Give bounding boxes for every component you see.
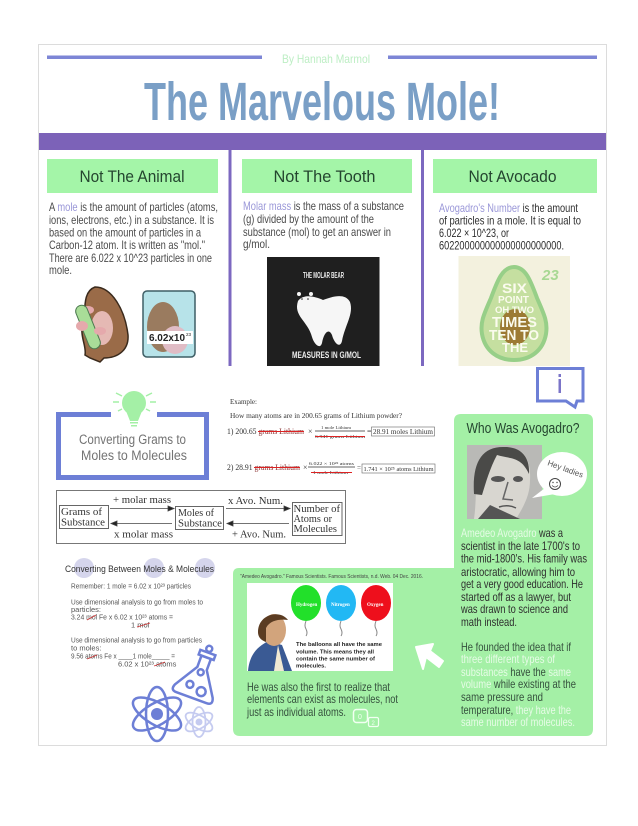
text block: Avogadro biography: scientist in the late 1700's to: [461, 539, 580, 553]
worked example: How many atoms are in 200.65 grams of Lithium powder?: [230, 412, 402, 420]
text block: dimensional analysis: to moles:: [71, 644, 101, 652]
heading: not the animal: [47, 159, 218, 193]
text block: dimensional analysis: Use dimensional analysis to go from particles: [71, 636, 202, 644]
text block: dimensional analysis: particles:: [71, 605, 101, 614]
balloon: hydrogen: [291, 585, 321, 636]
arrow labels: + molar mass: [113, 495, 171, 506]
image: avocado: THE: [502, 340, 528, 355]
byline: By Hannah Marmol: [282, 52, 370, 66]
image: avocado: OH TWO: [495, 305, 534, 316]
image: molar bear tooth: MEASURES IN G/MOL: [292, 350, 361, 361]
text block: Avogadro's law: same number of molecules.: [461, 715, 575, 729]
callout: hey ladies speech bubble: [532, 452, 587, 498]
image: molar bear tooth: THE MOLAR BEAR: [303, 271, 344, 280]
text block: mole definition: A mole is the amount of particles (atoms,: [49, 200, 218, 214]
step 1: 6.941 grams Lithium: [315, 434, 366, 439]
text block: Avogadro's number: [439, 201, 581, 252]
column divider 2: [421, 150, 424, 366]
text block: Avogadro's law: temperature, they have the: [461, 703, 571, 717]
box: number of atoms or molecules: Number of: [294, 504, 341, 515]
text block: mole definition: based on the amount of particles in a: [49, 226, 201, 240]
box: grams of substance: Grams of: [61, 507, 103, 518]
icon: O2 molecule: 0: [358, 714, 362, 721]
image: balloons with Avogadro: [247, 583, 393, 671]
step 2: [227, 461, 435, 475]
text block: Avogadro biography: was drawn to science and: [460, 602, 568, 616]
text block: dimensional analysis: 1 mol: [131, 620, 150, 630]
balloon caption: The balloons all have the same: [296, 642, 382, 648]
image: avocado: POINT: [498, 294, 530, 306]
step 2: =: [357, 464, 361, 472]
text block: Avogadro biography: math instead.: [461, 615, 517, 629]
icon: mole in beaker: 6.02x10: [149, 333, 185, 344]
arrow labels: + Avo. Num.: [232, 530, 286, 540]
balloon: oxygen: Oxygen: [367, 603, 384, 608]
text block: mole definition: [49, 200, 218, 277]
arrow labels: x molar mass: [114, 530, 173, 540]
step 1: ×: [308, 427, 313, 436]
text block: molar mass definition: g/mol.: [243, 237, 270, 251]
text block: Avogadro biography: aristocratic, allowing him to: [461, 565, 575, 579]
balloon caption: contain the same number of: [296, 656, 375, 662]
icon: small atom: [183, 707, 215, 737]
header rule: right: [388, 56, 597, 59]
text block: Avogadro's law: He founded the idea that if: [461, 640, 572, 654]
text block: mole definition: mole.: [49, 263, 72, 277]
image: avocado: TEN TO: [489, 328, 539, 344]
step 1: 28.91 moles Lithium: [373, 427, 433, 436]
worked example: [227, 398, 435, 475]
arrow labels: [113, 495, 286, 540]
red cancel marks: [87, 615, 165, 666]
box: moles of substance: Moles of: [178, 508, 214, 519]
worked example: Example:: [230, 398, 257, 406]
step 1: =: [367, 427, 372, 436]
text block: Avogadro's law: three different types of: [461, 652, 556, 666]
icon: light bulb: [113, 391, 156, 426]
text block: molecules note: [246, 680, 399, 719]
heading: not the tooth: Not The Tooth: [274, 167, 376, 186]
text block: mole definition: There are 6.022 x 10^23 particles in one: [49, 251, 212, 265]
icon: mole in beaker: [143, 291, 195, 357]
image: avocado: TIMES: [492, 314, 537, 331]
image: Avogadro portrait: [467, 445, 542, 519]
text block: molar mass definition: Molar mass is the mass of a substance: [243, 199, 404, 213]
icon: flask: [172, 639, 230, 705]
arrows: [110, 506, 290, 526]
panel: converting between moles and molecules: [65, 558, 230, 741]
step 2: 1 mole Lithium: [313, 470, 349, 475]
step 2: 2) 28.91 grams Lithium: [227, 463, 301, 472]
text block: dimensional analysis: Use dimensional analysis to go from moles to: [71, 598, 203, 606]
text block: Avogadro's law: same pressure and: [461, 690, 543, 704]
text block: Avogadro biography: the mid-1800's. His family was: [461, 552, 587, 566]
text block: molar mass definition: [243, 199, 404, 251]
text block: Avogadro's law: volume while existing at the: [461, 677, 576, 691]
text block: mole definition: Carbon-12 atom. It is written as "mol.": [49, 238, 205, 252]
balloon caption: volume. This means they all: [296, 650, 374, 656]
text block: Avogadro biography: Amedeo Avogadro was a: [461, 526, 563, 540]
box: number of atoms or molecules: Atoms or: [294, 514, 332, 525]
step 2: 6.022 × 10²³ atoms: [309, 461, 354, 466]
panel: not the tooth: [242, 159, 412, 366]
icon: mole holding test tube: [74, 287, 128, 362]
text block: molecules note: just as individual atoms.: [246, 705, 346, 719]
heading: converting grams to moles to molecules: Moles to Molecules: [81, 448, 187, 463]
text block: Avogadro's number: of particles in a mole. It is equal to: [439, 214, 581, 228]
text block: Avogadro's number: Avogadro's Number is the amount: [439, 201, 579, 215]
heading: converting grams to moles to molecules: [79, 432, 187, 463]
box: grams of substance: [60, 506, 108, 528]
purple banner bar: [39, 133, 606, 150]
header rule: left: [47, 56, 262, 59]
text block: dimensional analysis: 3.24 mol Fe x 6.02 x 10²³ atoms =: [71, 612, 174, 622]
panel: who was Avogadro and molecules note: [233, 414, 593, 736]
panel: not the animal: [47, 159, 218, 362]
text block: Avogadro's number: 602200000000000000000000.: [439, 238, 564, 252]
step 1: 1 mole Lithium: [321, 425, 352, 430]
panel: converting grams heading box: [58, 391, 206, 478]
text block: Avogadro biography: [460, 526, 587, 629]
arrow: white pointing up-left: [416, 644, 443, 669]
icon: O2 molecule: 2: [372, 721, 376, 727]
text block: molecules note: elements can exist as molecules, not: [247, 692, 399, 706]
heading: not the tooth: [242, 159, 412, 193]
text block: molar mass definition: (g) divided by the amount of the: [243, 212, 374, 226]
heading: not the animal: Not The Animal: [80, 167, 184, 186]
box: grams of substance: Substance: [61, 518, 105, 528]
text block: dimensional analysis: 6.02 x 10²³ atoms: [118, 660, 177, 668]
icon: info speech bubble: [538, 368, 583, 407]
text block: dimensional analysis: [71, 582, 203, 668]
heading: Converting Between Moles & Molecules: [65, 564, 214, 575]
heading: not avocado: [433, 159, 597, 193]
balloon: nitrogen: Nitrogen: [331, 603, 350, 608]
image: molar bear tooth: [267, 257, 380, 366]
text block: mole definition: ions, electrons, etc.) in a substance. It is: [49, 213, 214, 227]
heading: who was Avogadro: Who Was Avogadro?: [466, 420, 580, 437]
heading: converting grams to moles to molecules: Converting Grams to: [79, 432, 186, 447]
balloon: nitrogen: [326, 585, 356, 636]
box: moles of substance: [176, 506, 224, 530]
text block: molecules note: He was also the first to realize that: [247, 680, 391, 694]
text block: molar mass definition: substance (mol) to get an answer in: [243, 225, 391, 239]
step 1: 1) 200.65 grams Lithium: [227, 427, 305, 436]
icon: O2 molecule: [354, 710, 378, 727]
arrow labels: x Avo. Num.: [228, 496, 283, 507]
image: avocado: SIX: [502, 280, 528, 296]
citation: "Amedeo Avogadro." Famous Scientists. Famous Scientists, n.d. Web. 04 Dec. 2016.: [240, 574, 423, 580]
step 1: [227, 425, 434, 439]
callout: hey ladies speech bubble: Hey ladies: [546, 458, 585, 480]
icon: mole in beaker: 23: [186, 332, 192, 337]
image: avocado: 23: [541, 267, 559, 284]
balloon: oxygen: [361, 585, 391, 636]
text block: Avogadro's law: substances have the same: [461, 665, 571, 679]
text block: Avogadro biography: get a very good education. He: [461, 577, 583, 591]
decorative circles behind heading: [74, 558, 215, 578]
balloon caption: [296, 642, 382, 670]
box: number of atoms or molecules: [292, 502, 342, 536]
balloon caption: molecules.: [296, 664, 326, 670]
balloon: hydrogen: Hydrogen: [296, 603, 318, 608]
image: avocado: [458, 256, 570, 366]
text block: Avogadro's law: [461, 640, 576, 729]
text block: Avogadro biography: started off as a lawyer, but: [461, 590, 572, 604]
text block: Avogadro's number: 6.022 × 10^23, or: [439, 226, 509, 240]
step 2: ×: [303, 463, 308, 472]
column divider 1: [228, 150, 232, 366]
icon: large atom: [128, 687, 186, 741]
flow diagram: grams to moles to molecules: [56, 490, 346, 544]
text block: dimensional analysis: Remember: 1 mole = 6.02 x 10²³ particles: [71, 582, 191, 590]
panel: not avocado: [433, 159, 597, 366]
heading: not avocado: Not Avocado: [468, 167, 556, 186]
caricature of Avogadro: [248, 614, 292, 671]
box: moles of substance: Substance: [178, 518, 222, 530]
step 2: 1.741 × 10²⁵ atoms Lithium: [364, 467, 434, 473]
box: number of atoms or molecules: Molecules: [294, 524, 337, 535]
text block: dimensional analysis: 9.56 atoms Fe x ____1 mole_____ =: [71, 652, 176, 660]
